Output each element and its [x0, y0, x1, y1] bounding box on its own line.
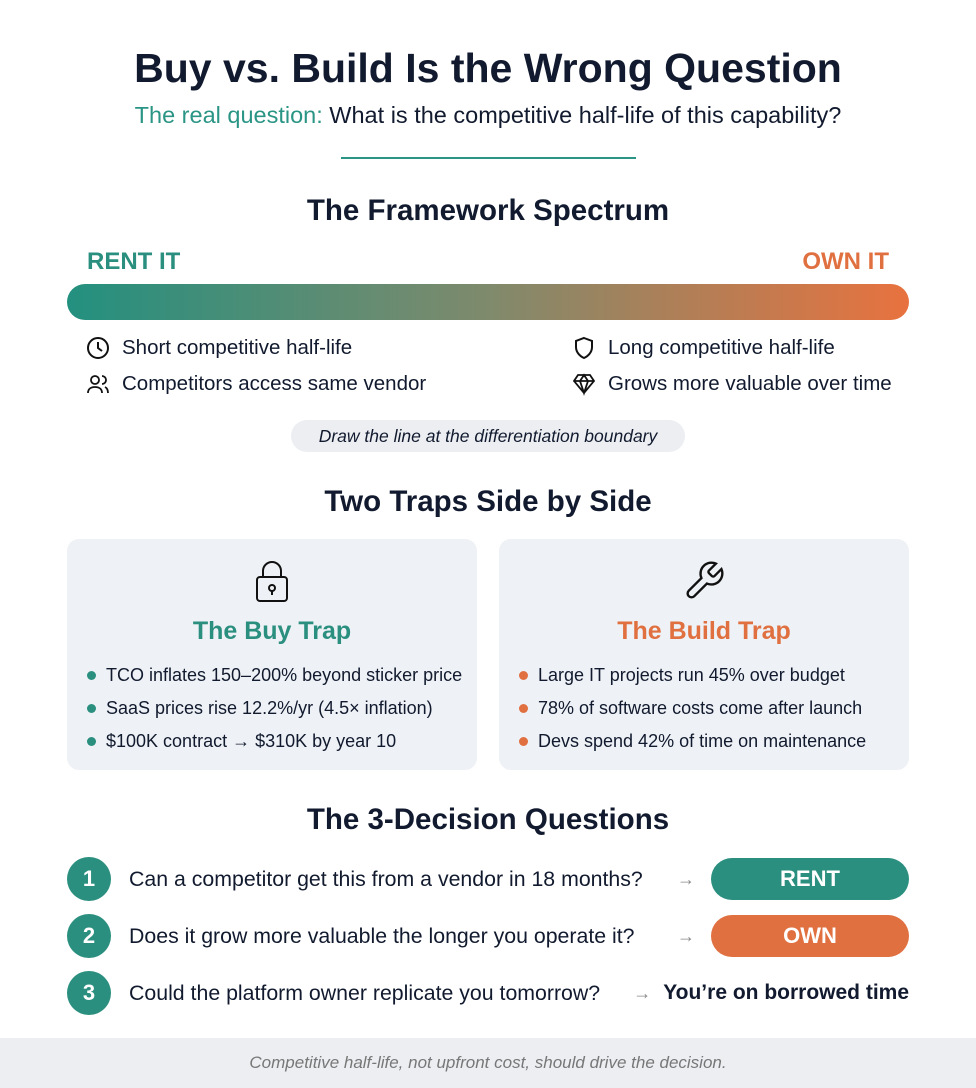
- icon: lock: [256, 561, 288, 602]
- question 3: [67, 971, 909, 1015]
- spectrum bar: [67, 284, 909, 320]
- own attributes: [572, 336, 892, 396]
- label: rent it: RENT IT: [87, 248, 180, 275]
- callout pill: [291, 420, 685, 452]
- own attributes: Long competitive half-life: [608, 336, 835, 359]
- footer: [0, 1038, 976, 1088]
- icon: wrench: [686, 562, 724, 598]
- question 3: Could the platform owner replicate you tomorrow?: [129, 980, 600, 1004]
- panel: build trap: The Build Trap: [617, 617, 791, 645]
- question 1: [67, 857, 909, 901]
- panel: buy trap: The Buy Trap: [193, 617, 351, 645]
- question 2: OWN: [783, 923, 837, 948]
- question 2: Does it grow more valuable the longer you operate it?: [129, 924, 634, 948]
- heading: decision questions: The 3-Decision Questions: [307, 803, 669, 836]
- panel: build trap: Devs spend 42% of time on maintenance: [538, 731, 866, 751]
- panel: build trap: [499, 539, 909, 770]
- question 1: RENT: [780, 866, 840, 891]
- panel: build trap: Large IT projects run 45% over budget: [538, 665, 845, 685]
- rent attributes: Competitors access same vendor: [122, 372, 426, 395]
- title: Buy vs. Build Is the Wrong Question: [134, 45, 842, 91]
- footer: Competitive half-life, not upfront cost, should drive the decision.: [249, 1053, 727, 1072]
- panel: build trap: 78% of software costs come after launch: [538, 698, 862, 718]
- heading: framework spectrum: The Framework Spectrum: [307, 194, 669, 227]
- callout pill: Draw the line at the differentiation boundary: [319, 426, 657, 446]
- question 3: 3: [83, 980, 95, 1005]
- rent attributes: [87, 336, 426, 395]
- panel: buy trap: SaaS prices rise 12.2%/yr (4.5× inflation): [106, 698, 433, 718]
- question 1: 1: [83, 866, 95, 891]
- question 3: You’re on borrowed time: [663, 981, 909, 1004]
- label: own it: OWN IT: [802, 248, 889, 275]
- heading: two traps: Two Traps Side by Side: [324, 485, 652, 518]
- question 2: [67, 914, 909, 958]
- rent attributes: Short competitive half-life: [122, 336, 352, 359]
- panel: buy trap: $100K contract → $310K by year 10: [106, 731, 396, 751]
- own attributes: Grows more valuable over time: [608, 372, 892, 395]
- panel: buy trap: TCO inflates 150–200% beyond sticker price: [106, 665, 462, 685]
- question 1: →: [677, 868, 695, 888]
- question 1: Can a competitor get this from a vendor in 18 months?: [129, 866, 643, 890]
- question 2: 2: [83, 923, 95, 948]
- question 2: →: [677, 926, 695, 946]
- question 3: →: [633, 982, 651, 1002]
- panel: buy trap: [67, 539, 477, 770]
- subtitle: The real question: What is the competitive half-life of this capability?: [135, 102, 841, 128]
